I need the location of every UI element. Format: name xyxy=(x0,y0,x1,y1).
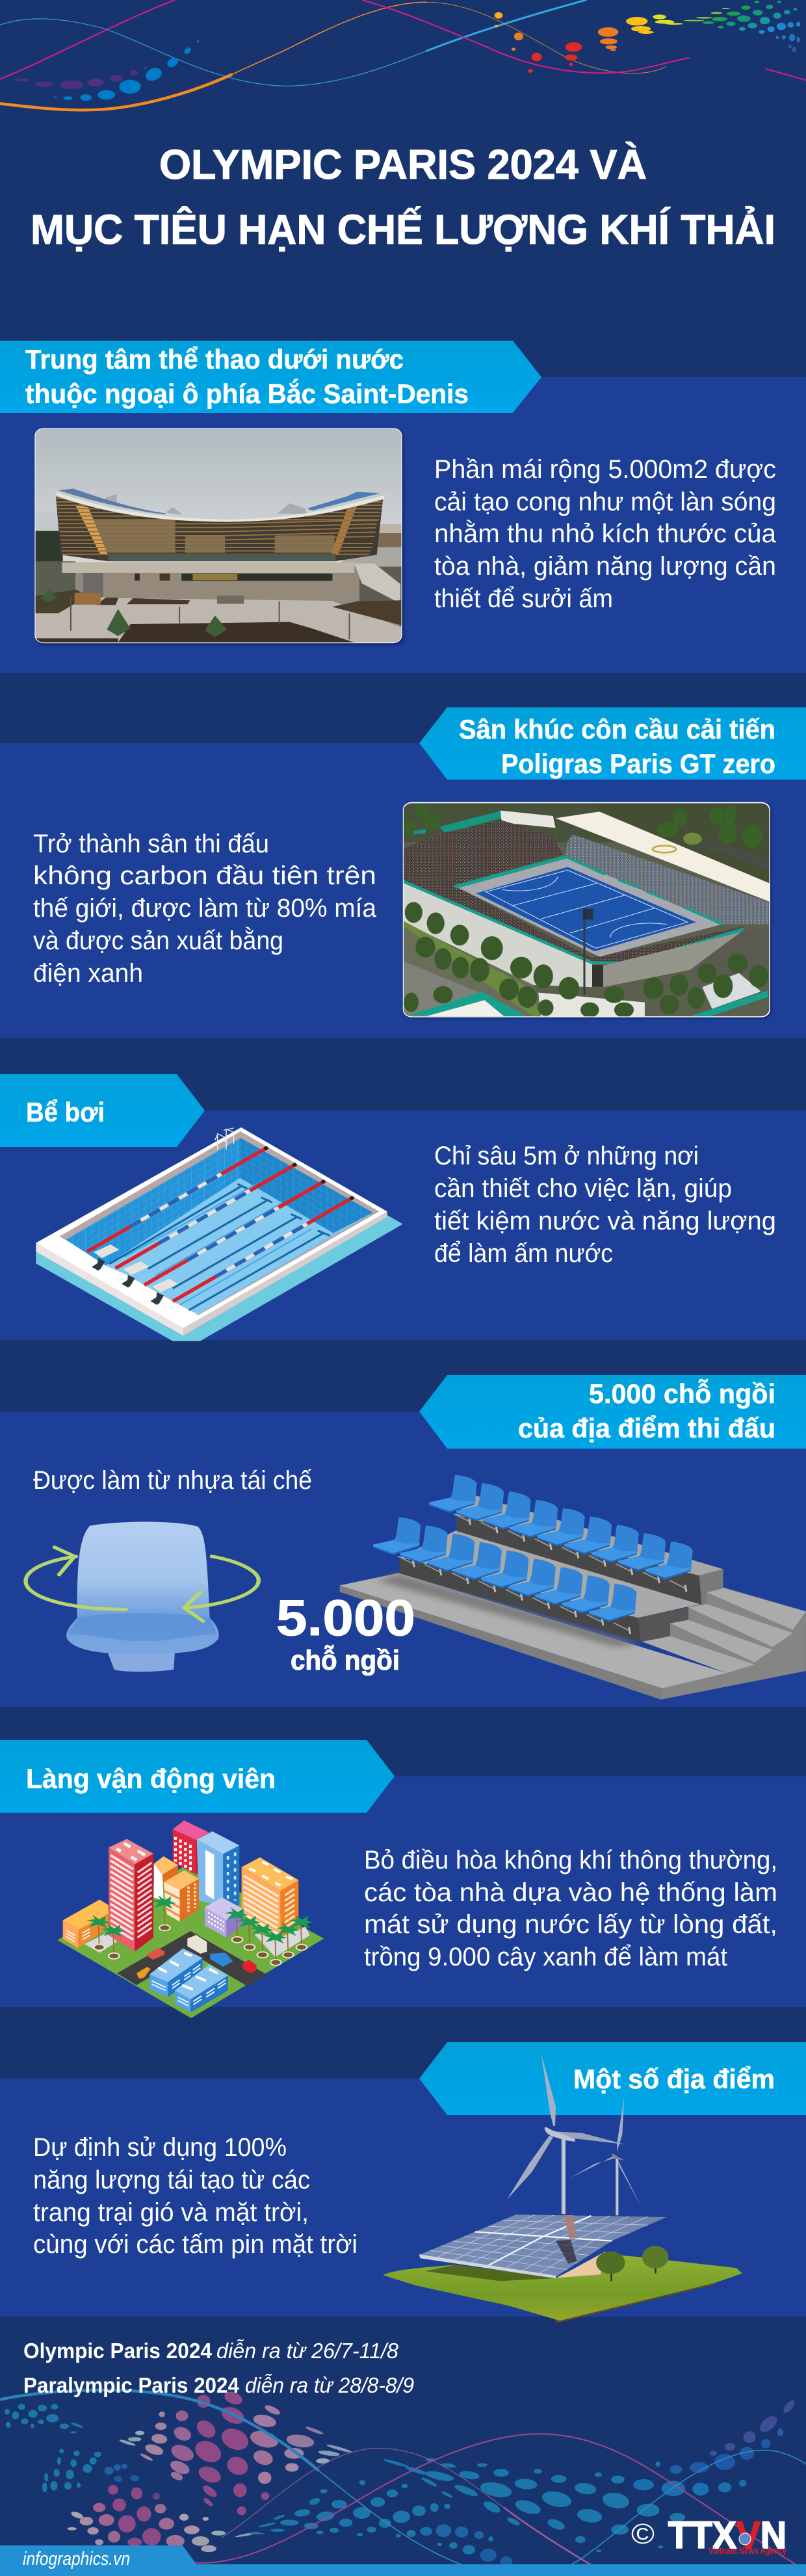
footer bar with source tab xyxy=(0,2545,806,2576)
orange tall building xyxy=(242,1858,298,1938)
banner: hockey pitch: Poligras Paris GT zero xyxy=(501,748,775,779)
text: aquatics centre description: Phần mái rộng 5.000m2 được xyxy=(434,455,776,484)
logo: TTXVN: TTXVN xyxy=(668,2514,786,2556)
banner: aquatics centre xyxy=(0,341,541,413)
text: pool description: tiết kiệm nước và năng lượng xyxy=(434,1207,776,1235)
text: renewable energy description xyxy=(33,2133,358,2259)
text: hockey pitch description: Trở thành sân thi đấu xyxy=(33,830,269,858)
trees xyxy=(596,2246,668,2281)
text: aquatics centre description: cải tạo cong như một làn sóng xyxy=(434,488,776,516)
purple building xyxy=(205,1897,244,1938)
title: MỤC TIÊU HẠN CHẾ LƯỢNG KHÍ THẢI xyxy=(31,205,775,253)
text: renewable energy description: Dự định sử dụng 100% xyxy=(33,2133,287,2162)
logo: TTXVN: © xyxy=(631,2518,655,2550)
title: OLYMPIC PARIS 2024 VÀ xyxy=(159,141,647,188)
panel: renewable energy xyxy=(0,2042,806,2323)
banner: seats: của địa điểm thi đấu xyxy=(518,1413,775,1443)
banner: seats xyxy=(419,1375,806,1449)
title xyxy=(31,141,775,253)
text: recycled plastic: Được làm từ nhựa tái chế xyxy=(33,1466,312,1495)
callout: 5,000 seats: 5.000 xyxy=(276,1589,415,1646)
text: pool description xyxy=(434,1142,776,1268)
callout: 5,000 seats xyxy=(276,1589,415,1676)
banner: aquatics centre: Trung tâm thể thao dưới nước xyxy=(25,344,404,375)
panel: swimming pool xyxy=(0,1074,806,1341)
text: hockey pitch description xyxy=(33,830,377,988)
low blue buildings xyxy=(150,1949,228,2012)
text: aquatics centre description xyxy=(434,455,777,613)
text: event dates xyxy=(23,2339,414,2397)
banner: seats: 5.000 chỗ ngồi xyxy=(589,1378,775,1409)
blue tower xyxy=(197,1832,239,1906)
red tall tower xyxy=(109,1839,153,1952)
text: renewable energy description: cùng với các tấm pin mặt trời xyxy=(33,2230,358,2259)
text: pool description: để làm ấm nước xyxy=(434,1239,613,1268)
text: hockey pitch description: điện xanh xyxy=(33,959,143,988)
text: pool description: cần thiết cho việc lặn, giúp xyxy=(434,1174,732,1203)
text: aquatics centre description: tòa nhà, giảm năng lượng cần xyxy=(434,552,776,581)
banner: venues xyxy=(419,2042,806,2115)
photo: aquatics centre building xyxy=(34,428,404,645)
panel: seats xyxy=(0,1375,806,1707)
text: hockey pitch description: và được sản xuất bằng xyxy=(33,926,283,955)
panel: hockey pitch xyxy=(0,707,806,1038)
illustration: concrete stands with blue seats xyxy=(340,1475,806,1700)
banner: swimming pool: Bể bơi xyxy=(26,1097,105,1127)
panel: athletes village xyxy=(0,1740,806,2018)
footer bar with source tab: infographics.vn xyxy=(23,2549,130,2569)
banner: swimming pool xyxy=(0,1074,205,1147)
text: hockey pitch description: không carbon đầu tiên trên xyxy=(33,861,376,890)
photo: hockey stadium xyxy=(403,802,772,1018)
text: event dates: Olympic Paris 2024 xyxy=(23,2339,213,2363)
decorative header waves and dots xyxy=(0,0,806,110)
text: pool description: Chỉ sâu 5m ở những nơi xyxy=(434,1142,699,1170)
banner: hockey pitch: Sân khúc côn cầu cải tiến xyxy=(459,714,775,744)
text: renewable energy description: trang trại gió và mặt trời, xyxy=(33,2198,309,2227)
text: aquatics centre description: nhằm thu nhỏ kích thước của xyxy=(434,519,777,548)
text: hockey pitch description: thế giới, được làm từ 80% mía xyxy=(33,894,377,923)
illustration: isometric city xyxy=(57,1820,324,2018)
text: athletes village description: mát sử dụng nước lấy từ lòng đất, xyxy=(364,1910,777,1939)
text: athletes village description: Bỏ điều hòa không khí thông thường, xyxy=(364,1846,777,1874)
banner: hockey pitch xyxy=(419,707,806,780)
text: event dates: Paralympic Paris 2024 xyxy=(23,2373,240,2397)
small orange building xyxy=(154,1856,178,1900)
text: aquatics centre description: thiết để sưởi ấm xyxy=(434,585,613,613)
solar panels xyxy=(419,2215,666,2278)
turbine towers and blades xyxy=(507,2053,642,2215)
footer decorative dots and waves xyxy=(0,2390,806,2567)
orange mid building xyxy=(164,1871,199,1922)
vehicles xyxy=(136,1935,257,1978)
text: event dates: diễn ra từ 26/7-11/8 xyxy=(216,2339,399,2363)
callout: 5,000 seats: chỗ ngồi xyxy=(291,1644,400,1676)
text: athletes village description: các tòa nhà dựa vào hệ thống làm xyxy=(364,1878,777,1907)
illustration: swimming pool xyxy=(36,1127,403,1341)
banner: athletes village xyxy=(0,1740,395,1813)
illustration: recycled seat with arrows xyxy=(26,1522,259,1672)
banner: aquatics centre: thuộc ngoại ô phía Bắc Saint-Denis xyxy=(25,378,469,409)
palm trees xyxy=(86,1895,313,1966)
panel: aquatics centre xyxy=(0,341,806,673)
illustration: wind turbines, solar panels, grass xyxy=(383,2053,742,2323)
low orange building xyxy=(63,1900,109,1949)
text: athletes village description: trồng 9.000 cây xanh để làm mát xyxy=(364,1943,727,1971)
text: event dates: diễn ra từ 28/8-8/9 xyxy=(245,2373,414,2397)
text: athletes village description xyxy=(364,1846,777,1971)
text: renewable energy description: năng lượng tái tạo từ các xyxy=(33,2166,310,2194)
banner: venues: Một số địa điểm xyxy=(573,2064,775,2094)
back pink tower xyxy=(173,1820,209,1874)
banner: athletes village: Làng vận động viên xyxy=(26,1763,276,1794)
grass plot xyxy=(383,2252,742,2323)
